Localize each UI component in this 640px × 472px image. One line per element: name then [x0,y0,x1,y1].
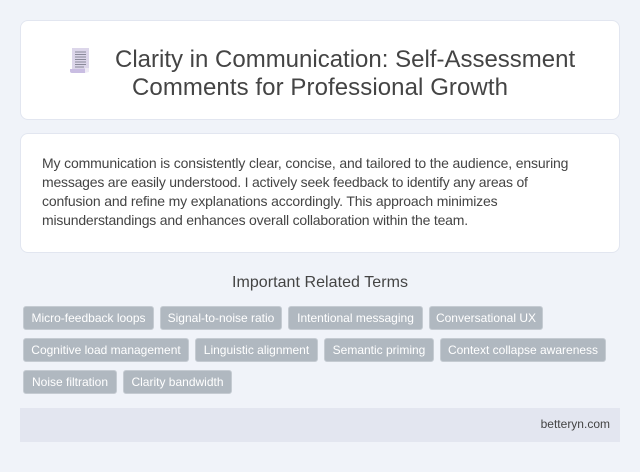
tag [429,306,543,330]
heading: title line 2: Comments for Professional Growth [132,74,508,101]
tag [440,338,606,362]
tag: Intentional messaging [297,311,414,325]
tag [195,338,318,362]
tag: Signal-to-noise ratio [168,311,274,325]
tag: Cognitive load management [31,343,181,357]
text: description line 4: misunderstandings and enhances overall collaboration within the team. [42,212,468,228]
panel: title card [20,20,620,120]
text: footer source: betteryn.com [541,417,610,431]
tag [23,338,189,362]
heading: related terms: Important Related Terms [232,274,408,291]
tag [288,306,423,330]
panel: description card [20,133,620,253]
tag [123,370,232,394]
text: description line 1: My communication is consistently clear, concise, and tailored to the audience, ensuring [42,155,568,171]
footer bar [20,408,620,442]
text: description line 2: messages are easily understood. I actively seek feedback to identify any areas of [42,174,528,190]
icon: document scroll [70,48,89,73]
tag: Linguistic alignment [204,343,309,357]
tag: Conversational UX [436,311,536,325]
tag: Micro-feedback loops [31,311,146,325]
tag: Clarity bandwidth [131,375,224,389]
tag [324,338,434,362]
tag [23,306,154,330]
tag: Semantic priming [333,343,425,357]
tag: Context collapse awareness [448,343,598,357]
tag [23,370,117,394]
text: description line 3: confusion and refine my explanations accordingly. This approach minimizes [42,193,498,209]
tag: Noise filtration [32,375,108,389]
heading: title line 1: Clarity in Communication: Self-Assessment [115,46,575,73]
tag [160,306,282,330]
